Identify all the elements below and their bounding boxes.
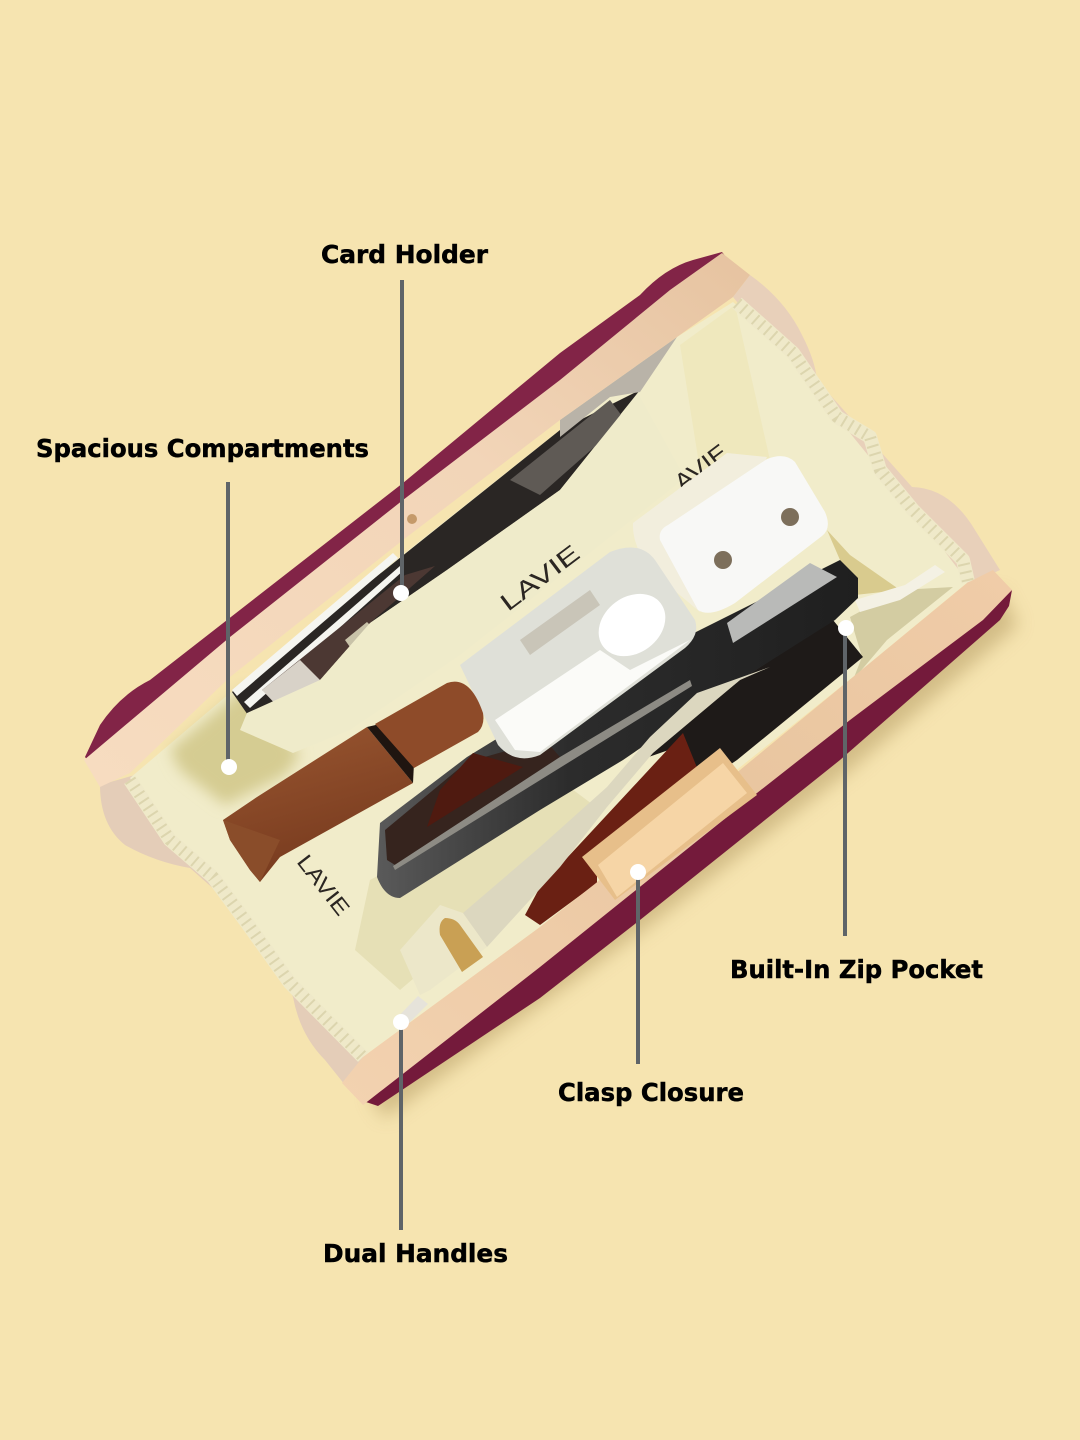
upper interior fold xyxy=(680,305,770,470)
callout: card holder: Card Holder xyxy=(321,240,489,269)
handle side panel left xyxy=(100,775,365,1085)
white strip xyxy=(855,565,945,612)
right interior shade xyxy=(827,530,900,595)
burgundy back panel xyxy=(85,252,740,775)
ruffled drawstring left xyxy=(130,780,363,1057)
lavie print lower left: LAVIE xyxy=(292,850,355,920)
handle side panel right xyxy=(733,275,1000,585)
handle clip xyxy=(393,996,428,1030)
callout: spacious compartments xyxy=(36,434,369,775)
top gold frame xyxy=(84,253,750,787)
burgundy front panel xyxy=(360,590,1012,1106)
callout: clasp closure xyxy=(558,864,744,1107)
interior lining xyxy=(130,302,968,1057)
clasp xyxy=(582,748,757,900)
ruffled drawstring right xyxy=(737,303,968,582)
dark compartment block xyxy=(640,620,863,785)
red lining behind zip xyxy=(525,733,700,925)
lower interior shade xyxy=(355,780,600,990)
card slots xyxy=(232,337,677,718)
lipstick xyxy=(223,682,483,882)
lavie print upper: AVIE xyxy=(669,439,734,497)
callout: dual handles xyxy=(323,1014,508,1268)
zip pocket strip xyxy=(400,667,770,995)
olive pocket area xyxy=(850,587,953,680)
bottom gold frame xyxy=(342,570,1012,1105)
callout: spacious compartments: Spacious Compartments xyxy=(36,434,369,463)
clear case xyxy=(460,548,696,758)
charger xyxy=(633,453,828,613)
callout: built-in zip pocket: Built-In Zip Pocket xyxy=(730,955,983,984)
bag shadow xyxy=(370,590,1018,1118)
frame rivet xyxy=(407,514,417,524)
callout: built-in zip pocket xyxy=(730,620,983,984)
phone xyxy=(377,560,858,898)
callout: clasp closure: Clasp Closure xyxy=(558,1078,744,1107)
clutch bag illustration xyxy=(84,252,1018,1118)
callout: dual handles: Dual Handles xyxy=(323,1239,508,1268)
interior olive shade xyxy=(170,685,300,805)
card holder pocket xyxy=(240,393,685,753)
callout: card holder xyxy=(321,240,489,601)
lavie print on pocket: LAVIE xyxy=(495,540,585,617)
